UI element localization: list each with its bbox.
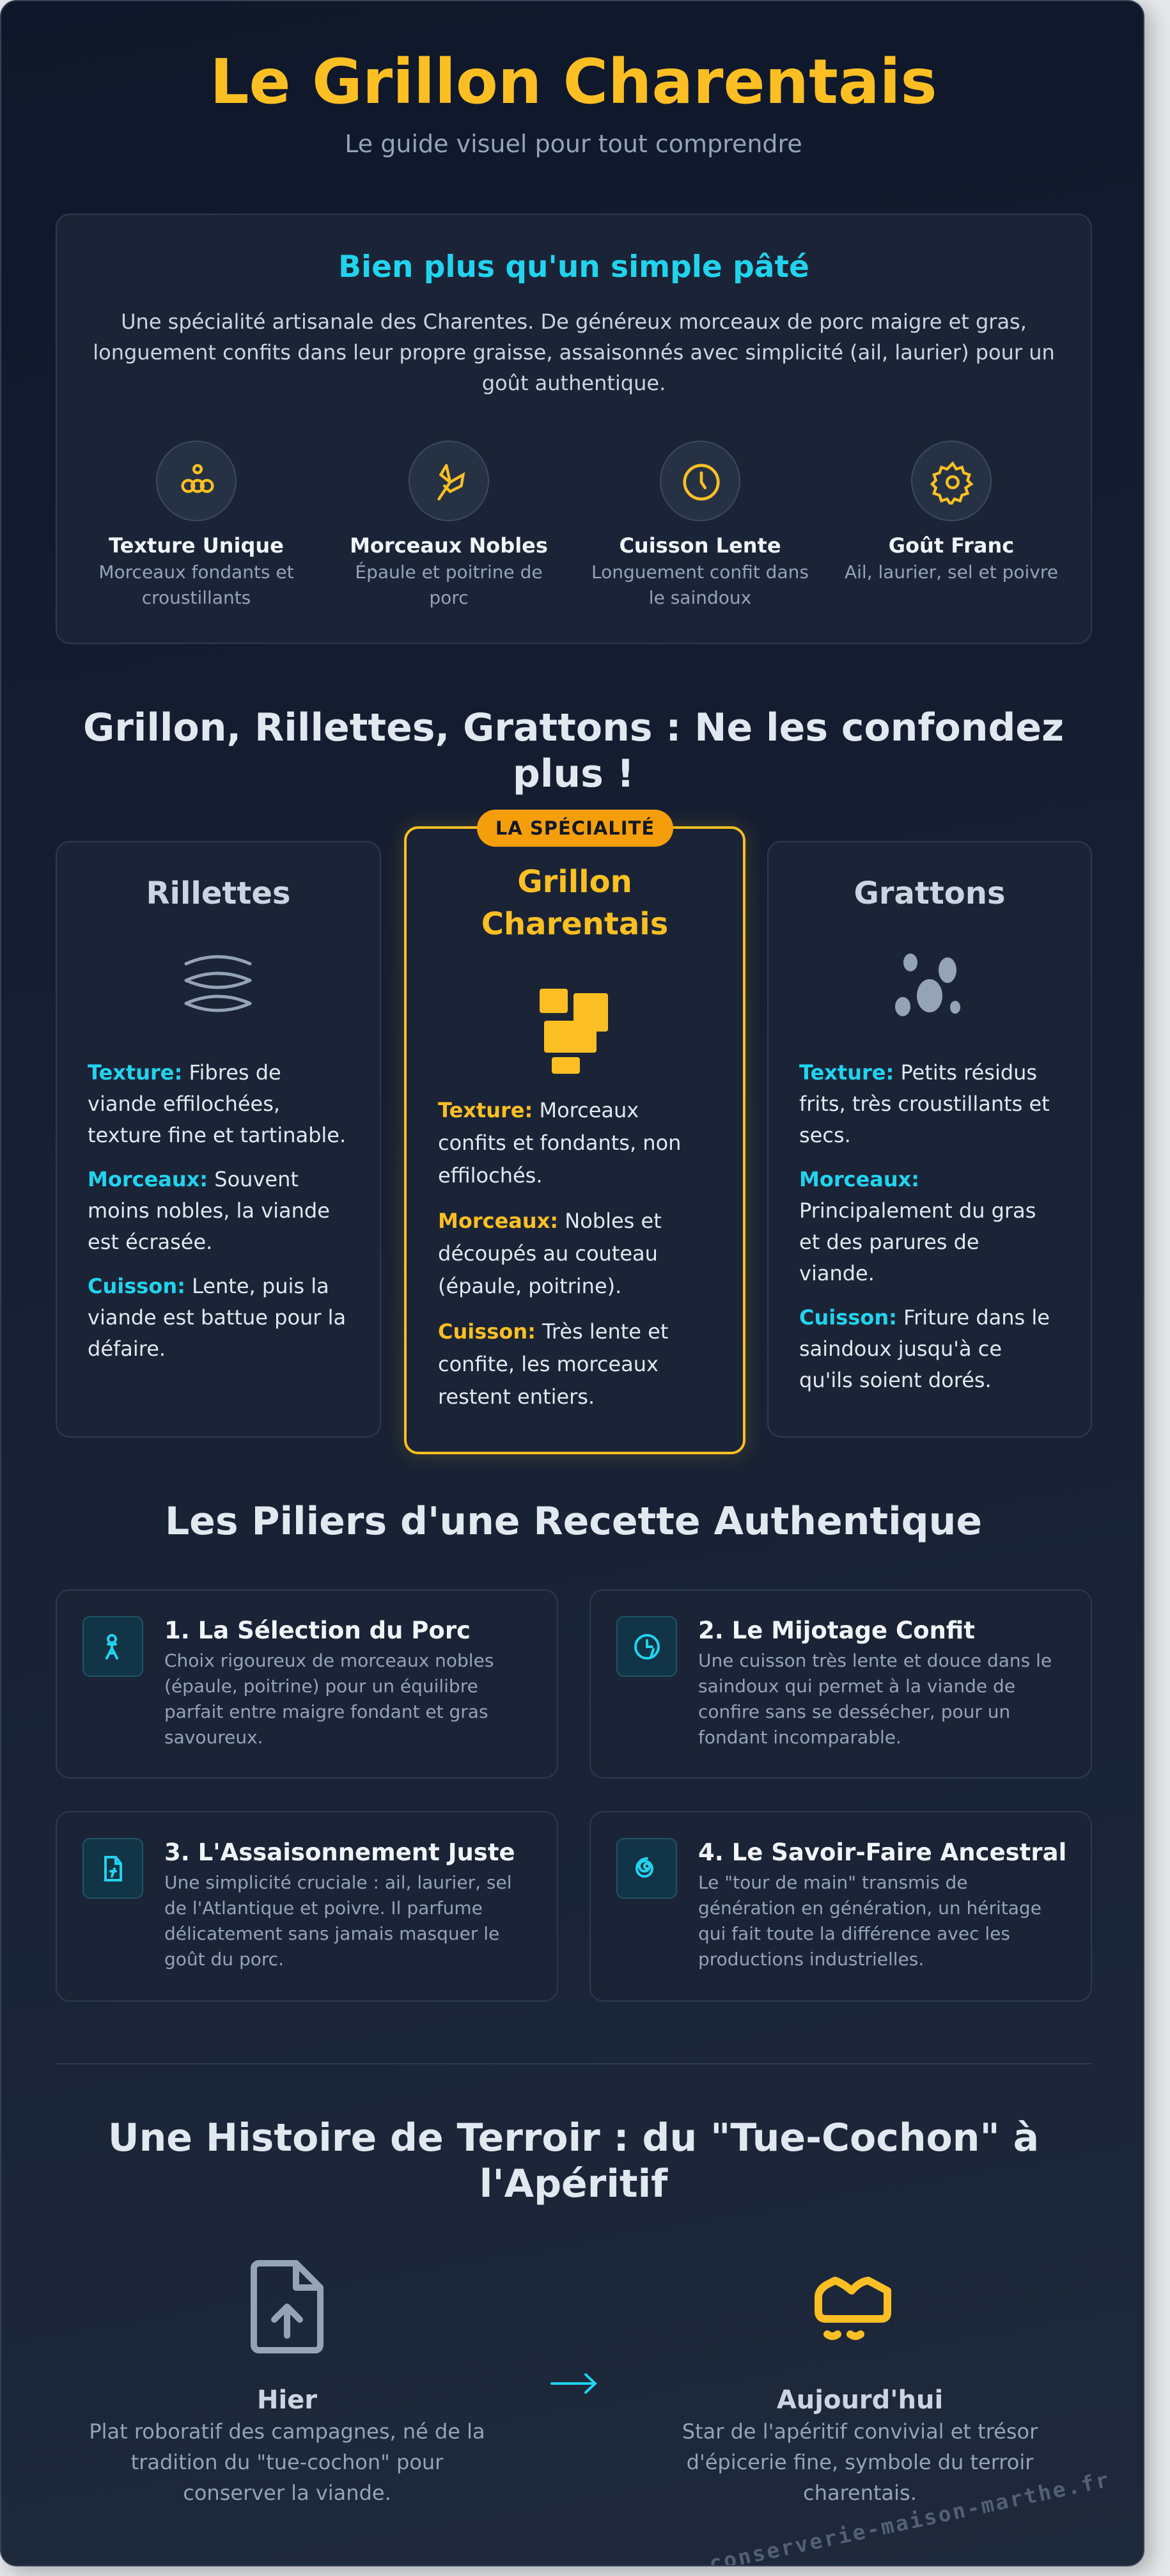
panel: grillon charentais [404, 826, 745, 1454]
feature: morceaux [350, 533, 548, 608]
grillon text: Morceaux: Nobles et découpés au couteau (épaule, poitrine). [438, 1209, 662, 1298]
icon: cuisson [660, 441, 740, 521]
icon: texture [156, 441, 237, 521]
aujourd'hui text: Star de l'apéritif convivial et trésor d'épicerie fine, symbole du terroir charentais. [682, 2419, 1038, 2505]
pillar 4 text [698, 1839, 1066, 1970]
pillar 3 text: Une simplicité cruciale : ail, laurier, sel de l'Atlantique et poivre. Il parfume délicatement sans jamais masquer le goût du porc. [164, 1872, 511, 1970]
panel: intro [56, 214, 1092, 644]
feature: texture: Morceaux fondants et croustillants [98, 562, 294, 608]
feature: morceaux: Morceaux Nobles [350, 533, 548, 558]
heading: piliers: Les Piliers d'une Recette Authentique [165, 1499, 982, 1544]
icon: document [251, 2260, 324, 2353]
grillon text: Cuisson: Très lente et confite, les morceaux restent entiers. [438, 1319, 668, 1409]
pillar 4 [589, 1811, 1092, 2002]
grillon text: Texture: Morceaux confits et fondants, non effilochés. [438, 1098, 681, 1188]
panel: rillettes [56, 841, 381, 1438]
feature: gout [845, 533, 1058, 583]
aujourd'hui title: Aujourd'hui [777, 2385, 943, 2415]
grattons heading: Grattons [854, 876, 1006, 911]
pillar 1 text: 1. La Sélection du Porc [164, 1617, 471, 1644]
pillar 3 [56, 1811, 558, 2002]
pillar 4 text: Le "tour de main" transmis de génération en génération, un héritage qui fait toute la différence avec les productions industrielles. [698, 1872, 1041, 1970]
grillon heading: Grillon [517, 864, 632, 900]
feature: cuisson: Longuement confit dans le saindoux [591, 562, 809, 608]
pillar 3 text: 3. L'Assaisonnement Juste [164, 1839, 515, 1866]
grattons text: Morceaux: Principalement du gras et des parures de viande. [799, 1167, 1036, 1285]
arrow [550, 2373, 597, 2394]
intro paragraph: Une spécialité artisanale des Charentes. De généreux morceaux de porc maigre et gras, longuement confits dans leur propre graisse, assaisonnés avec simplicité (ail, laurier) pour un goût authentique. [93, 310, 1055, 395]
rillettes heading: Rillettes [146, 876, 290, 911]
feature: morceaux: Épaule et poitrine de porc [355, 562, 543, 608]
icon: seasoning [82, 1838, 143, 1899]
feature: cuisson [591, 533, 809, 608]
hier text: Plat roboratif des campagnes, né de la tradition du "tue-cochon" pour conserver la viande. [89, 2419, 485, 2505]
pillar 1 text: Choix rigoureux de morceaux nobles (épaule, poitrine) pour un équilibre parfait entre maigre fondant et gras savoureux. [164, 1650, 494, 1748]
rillettes text: Morceaux: Souvent moins nobles, la viande est écrasée. [88, 1167, 330, 1254]
panel: grattons [767, 841, 1092, 1438]
hier title: Hier [257, 2385, 317, 2415]
icon: clock [616, 1616, 677, 1677]
feature: gout: Goût Franc [889, 533, 1014, 558]
intro heading: Bien plus qu'un simple pâté [338, 249, 809, 285]
title: Le Grillon Charentais [210, 46, 937, 118]
rillettes text [88, 1060, 346, 1361]
pillar 1 [56, 1589, 558, 1779]
feature: texture: Texture Unique [109, 533, 284, 558]
aujourd'hui block [682, 2277, 1038, 2505]
pillar 4 text: 4. Le Savoir-Faire Ancestral [698, 1839, 1066, 1866]
rillettes text: Cuisson: Lente, puis la viande est battue pour la défaire. [88, 1274, 346, 1361]
icon: cloud [815, 2277, 891, 2340]
feature: cuisson: Cuisson Lente [619, 533, 781, 558]
icon: gout [911, 441, 992, 521]
icon: dots [895, 954, 960, 1016]
pillar 2 text: 2. Le Mijotage Confit [698, 1617, 975, 1644]
grillon text [438, 1098, 681, 1409]
grattons text: Texture: Petits résidus frits, très croustillants et secs. [799, 1060, 1050, 1147]
icon: selection [82, 1616, 143, 1677]
heading: comparison: Grillon, Rillettes, Grattons : Ne les confondez plus ! [83, 705, 1064, 796]
subtitle: Le guide visuel pour tout comprendre [345, 130, 802, 158]
badge: la specialite [477, 810, 673, 847]
icon: cubes [540, 989, 608, 1074]
pillar 2 text: Une cuisson très lente et douce dans le saindoux qui permet à la viande de confire sans se dessécher, pour un fondant incomparable. [698, 1650, 1052, 1748]
feature: gout: Ail, laurier, sel et poivre [845, 562, 1058, 583]
icon: fibres [184, 955, 252, 1012]
heading: histoire: Une Histoire de Terroir : du "Tue-Cochon" à l'Apéritif [108, 2116, 1039, 2206]
grillon heading: Charentais [481, 906, 668, 942]
grattons text [799, 1060, 1050, 1392]
rillettes text: Texture: Fibres de viande effilochées, texture fine et tartinable. [88, 1060, 346, 1147]
grillon heading [481, 864, 668, 942]
badge: la specialite: LA SPÉCIALITÉ [495, 817, 655, 839]
icon: morceaux [409, 441, 489, 521]
icon: spiral [616, 1838, 677, 1899]
grattons text: Cuisson: Friture dans le saindoux jusqu'à ce qu'ils soient dorés. [799, 1305, 1050, 1392]
pillar 2 [589, 1589, 1092, 1779]
feature: texture [98, 533, 294, 608]
hier block [89, 2260, 485, 2505]
